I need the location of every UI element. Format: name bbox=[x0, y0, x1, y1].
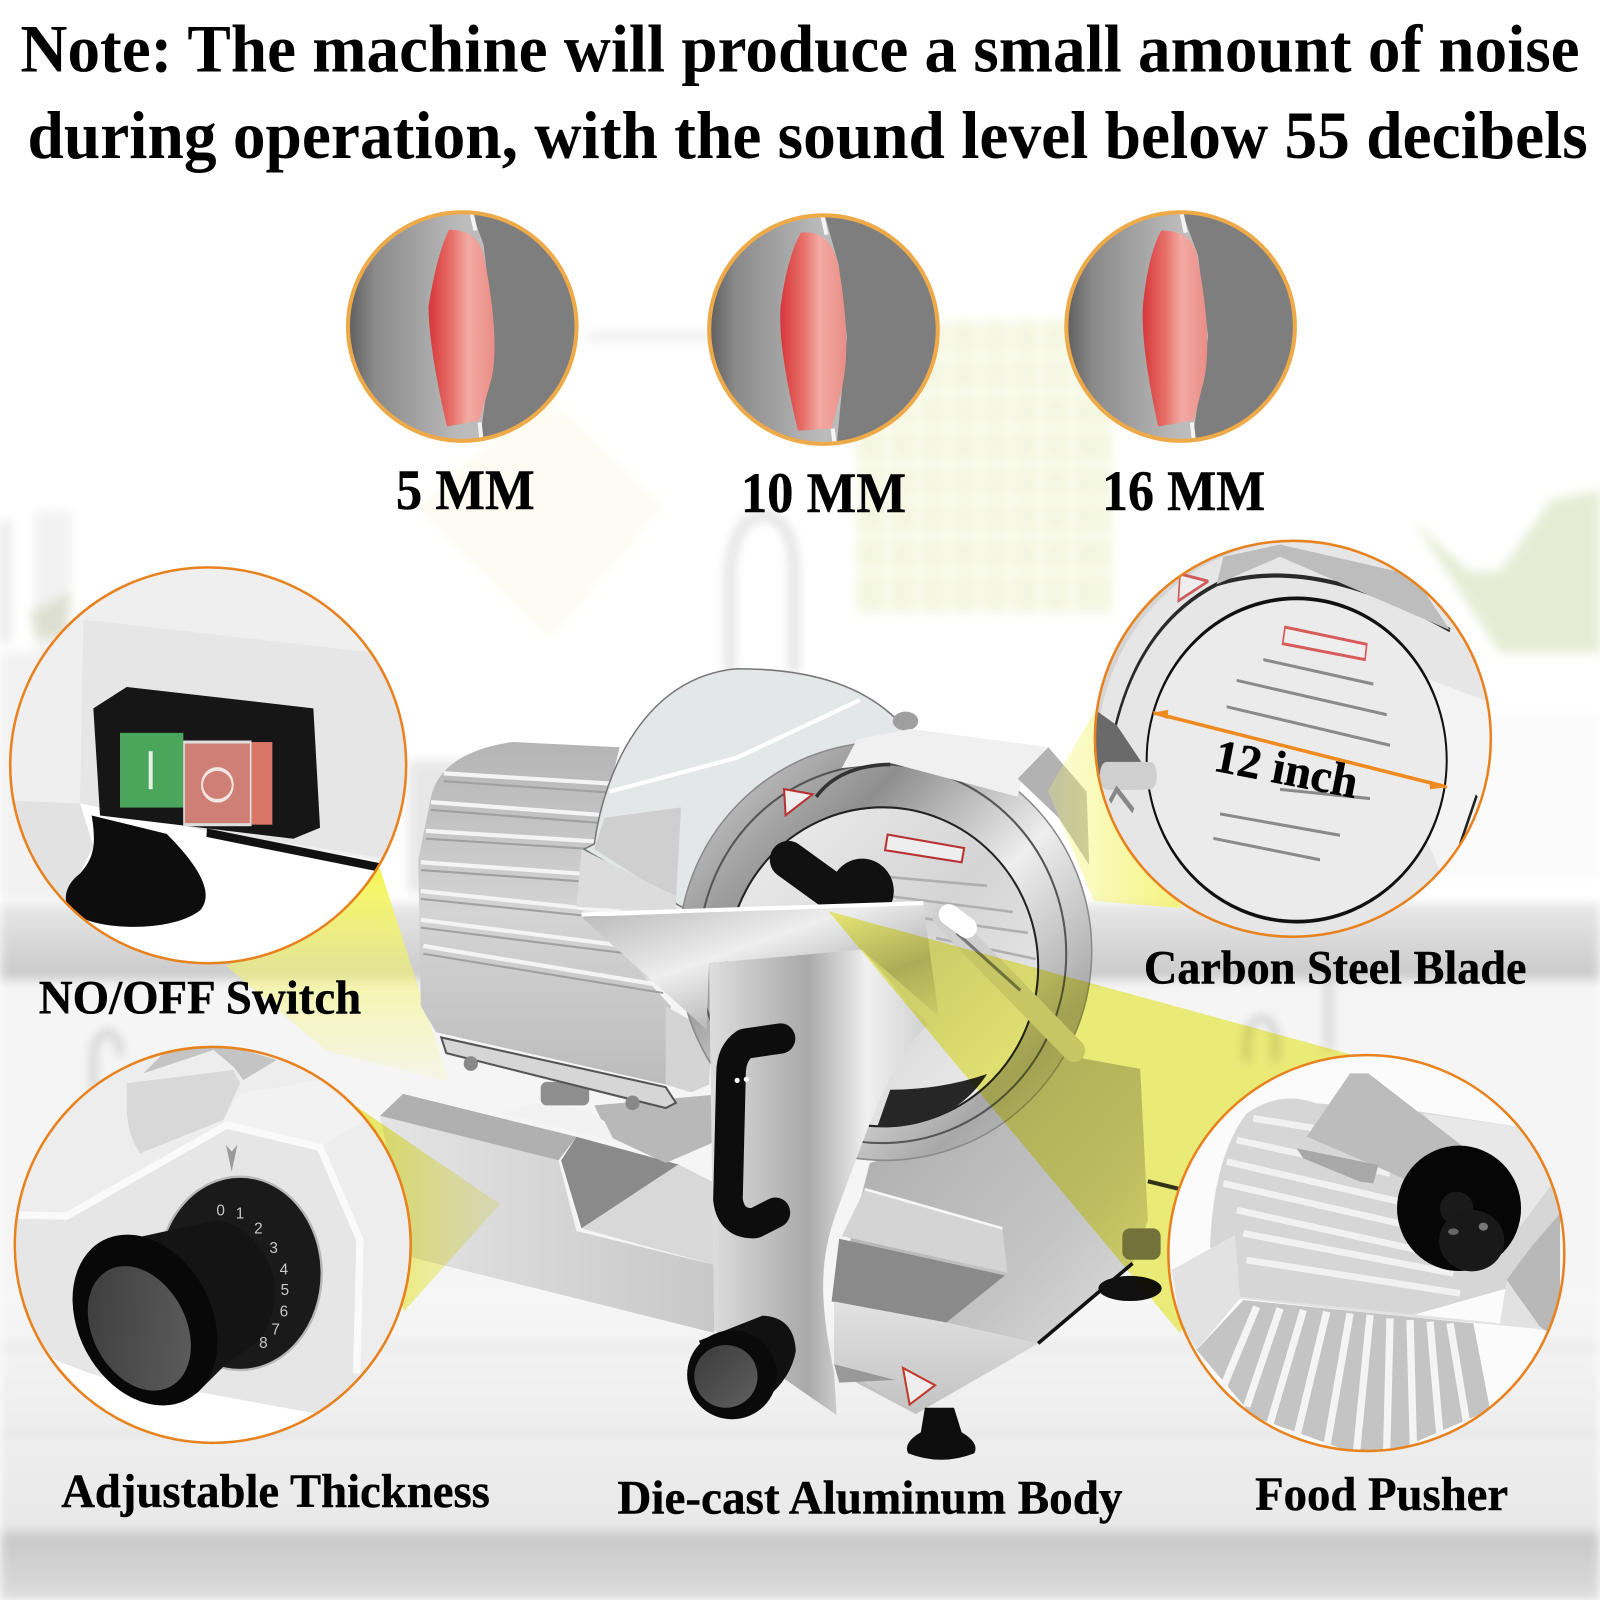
thickness sample: 16 mm bbox=[1065, 211, 1296, 442]
label: 10 MM: 10 MM bbox=[741, 462, 906, 525]
power cord gland bbox=[1122, 1181, 1180, 1260]
label: pusher: Food Pusher bbox=[1255, 1468, 1508, 1521]
panel border: switch bbox=[10, 567, 406, 963]
zoom panel: on/off switch bbox=[15, 568, 405, 962]
warning mark bbox=[1178, 574, 1208, 601]
front foot bbox=[907, 1408, 976, 1460]
knob face bbox=[88, 1266, 191, 1391]
left kitchen bbox=[14, 801, 94, 901]
knob rim bbox=[72, 1234, 218, 1406]
red button bbox=[184, 742, 272, 825]
carriage handle bbox=[728, 1038, 781, 1223]
foot bbox=[66, 816, 206, 927]
label: thickness: Adjustable Thickness bbox=[61, 1465, 490, 1518]
white underside bbox=[52, 1358, 314, 1442]
dial bbox=[158, 1145, 322, 1370]
label: body: Die-cast Aluminum Body bbox=[617, 1471, 1122, 1524]
light beam: thickness knob bbox=[347, 1100, 500, 1311]
carriage rod bbox=[944, 915, 1074, 1051]
switch frame bbox=[93, 687, 320, 839]
ribbed fan bbox=[1197, 1300, 1490, 1460]
diameter arrow bbox=[1153, 710, 1447, 789]
circular blade bbox=[727, 807, 1038, 1126]
pusher block bbox=[1307, 1073, 1463, 1180]
housing bbox=[54, 1358, 304, 1412]
dial numbers: 6 bbox=[280, 1303, 288, 1320]
thickness sample: 10 mm bbox=[708, 214, 939, 445]
black grip bbox=[1397, 1146, 1521, 1271]
tray plate bbox=[1172, 1236, 1546, 1350]
zoom panel: food pusher bbox=[1163, 1051, 1571, 1460]
blade bolt bbox=[1095, 710, 1157, 811]
label: switch: NO/OFF Switch bbox=[39, 971, 361, 1024]
panel border: thickness bbox=[15, 1047, 411, 1443]
green button bbox=[120, 733, 183, 808]
motor bottom rail bbox=[441, 1037, 676, 1110]
dial numbers: 3 bbox=[269, 1240, 278, 1257]
pusher teeth bbox=[1297, 1148, 1378, 1183]
panel border: blade bbox=[1095, 541, 1491, 937]
note heading: Note: The machine will produce a small amount of noise bbox=[20, 11, 1580, 86]
panel border: pusher bbox=[1168, 1055, 1564, 1451]
knob barrel bbox=[142, 1230, 224, 1394]
dial numbers: 2 bbox=[254, 1221, 263, 1238]
light beam: blade bbox=[1048, 706, 1182, 908]
top parts bbox=[143, 1047, 277, 1080]
safety triangle bbox=[903, 1368, 935, 1405]
dial numbers: 0 bbox=[216, 1202, 225, 1219]
slicer machine bbox=[380, 669, 1180, 1460]
blade grip knob bbox=[788, 859, 894, 923]
dial numbers: 7 bbox=[271, 1322, 280, 1339]
dial numbers bbox=[216, 1202, 289, 1352]
rear tray arm bbox=[380, 1094, 717, 1333]
dial numbers: 8 bbox=[259, 1335, 268, 1352]
label: 5 MM: 5 MM bbox=[396, 459, 535, 522]
blade ribs bbox=[1213, 660, 1390, 860]
ribbed carriage bbox=[1210, 1098, 1560, 1317]
diameter label: 12 inch bbox=[1210, 730, 1362, 809]
food carriage bbox=[582, 903, 939, 1030]
outer ring bbox=[1100, 542, 1486, 936]
light beam: food pusher bbox=[829, 911, 1357, 1333]
panel background bbox=[12, 568, 382, 861]
thickness sample: 5 mm bbox=[347, 211, 578, 442]
pedestal bbox=[502, 1082, 714, 1163]
front support plate bbox=[709, 950, 928, 1415]
label: blade: Carbon Steel Blade bbox=[1144, 942, 1527, 995]
label: 16 MM: 16 MM bbox=[1102, 460, 1265, 523]
blade disc bbox=[1147, 598, 1447, 922]
note heading bbox=[20, 11, 1588, 173]
carriage arm bbox=[1507, 1213, 1560, 1340]
zoom panel: thickness dial bbox=[16, 1048, 410, 1442]
dial numbers: 1 bbox=[236, 1205, 244, 1222]
dial numbers: 5 bbox=[281, 1282, 289, 1299]
warning triangle bbox=[784, 789, 813, 815]
upper ridge bbox=[223, 1080, 367, 1147]
switch housing wall bbox=[80, 620, 407, 861]
red label bbox=[1283, 627, 1367, 660]
blade housing and ring bbox=[678, 729, 1092, 1160]
right base bbox=[832, 1053, 1148, 1414]
motor housing bbox=[418, 742, 712, 1092]
bottom edge bbox=[207, 833, 380, 868]
slice guard bbox=[576, 669, 918, 912]
lower blade crescent bbox=[877, 1074, 987, 1127]
blade label bbox=[885, 835, 964, 862]
zoom panel: blade bbox=[1096, 542, 1488, 936]
rear foot bbox=[1098, 1276, 1162, 1301]
dial numbers: 4 bbox=[280, 1261, 289, 1278]
panel backdrop bbox=[127, 1070, 240, 1153]
lock knob bbox=[687, 1316, 796, 1419]
note heading: during operation, with the sound level below 55 decibels bbox=[28, 98, 1588, 173]
light beam: switch bbox=[227, 867, 449, 1082]
